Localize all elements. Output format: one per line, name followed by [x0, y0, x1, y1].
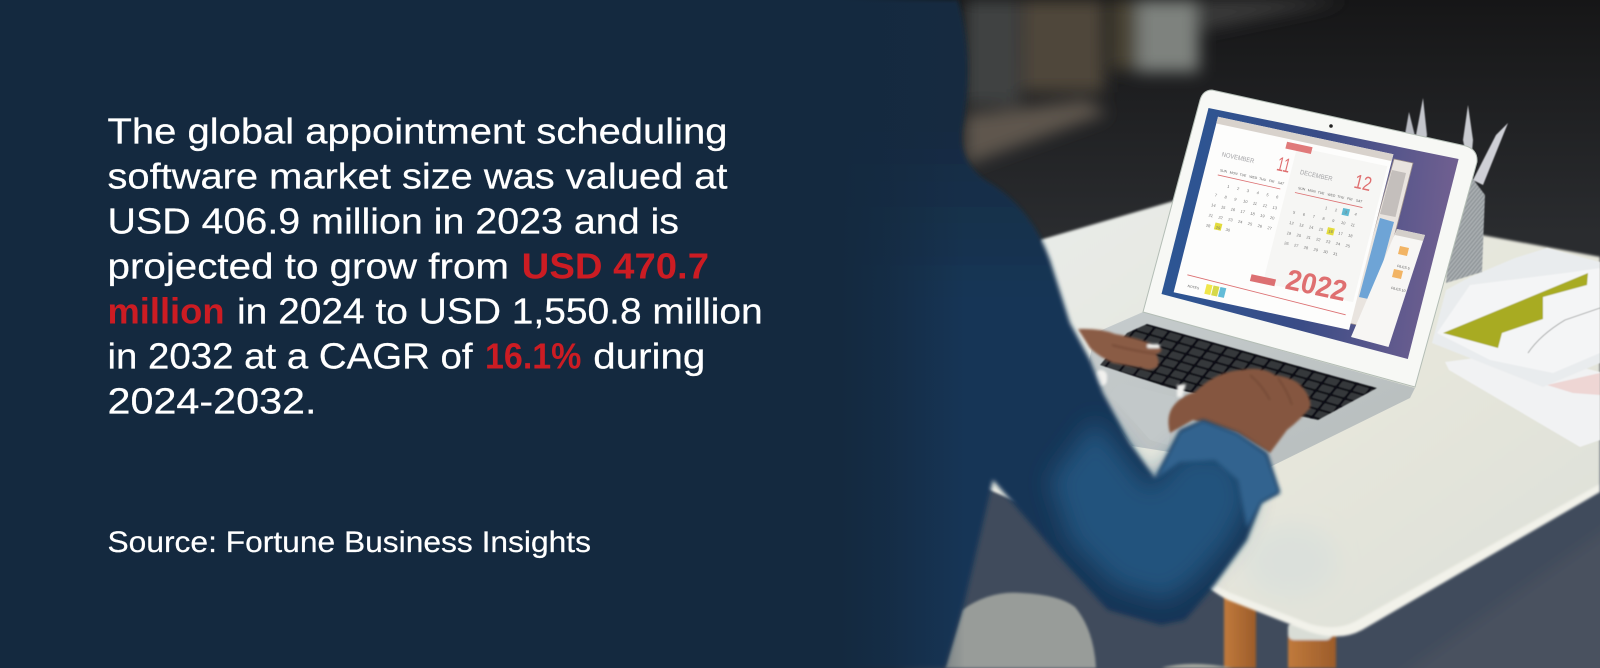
- december calendar: 20: [1296, 232, 1302, 238]
- december calendar: 9: [1332, 218, 1336, 223]
- november calendar: 11: [1275, 154, 1293, 178]
- december calendar: 15: [1318, 226, 1325, 232]
- november calendar: 29: [1215, 225, 1222, 231]
- trackpad: [1110, 383, 1175, 445]
- november calendar: 14: [1211, 202, 1217, 208]
- november calendar: 28: [1206, 223, 1212, 229]
- november calendar: THU: [1259, 177, 1267, 182]
- main statistic text: The global appointment scheduling: [108, 110, 728, 152]
- december calendar: WED: [1327, 192, 1336, 198]
- table top: [985, 187, 1600, 637]
- folder icons: [1398, 246, 1409, 256]
- december calendar: 1: [1325, 205, 1329, 211]
- december calendar: 31: [1333, 251, 1339, 257]
- navy fade into photo: [840, 0, 965, 668]
- main statistic text: software market size was valued at: [108, 156, 728, 196]
- november calendar: TUE: [1239, 173, 1247, 178]
- floor: [900, 430, 1600, 668]
- december calendar: TUE: [1317, 190, 1326, 196]
- november calendar: 10: [1243, 198, 1249, 204]
- november calendar: 20: [1269, 215, 1276, 221]
- december calendar: 13: [1299, 222, 1305, 228]
- year label: 2022: [1282, 264, 1350, 308]
- shirt cuff: [1157, 421, 1279, 528]
- december calendar: 22: [1316, 237, 1322, 242]
- calendar window: [1174, 117, 1393, 330]
- back window: [1348, 159, 1413, 328]
- november calendar: 17: [1240, 209, 1246, 215]
- laptop lid: [1143, 90, 1477, 387]
- main statistic text: million: [108, 290, 224, 332]
- main statistic text: [108, 110, 763, 422]
- main statistic text: 2024-2032.: [108, 380, 316, 422]
- december calendar: THU: [1337, 195, 1345, 200]
- red tabs: [1285, 142, 1313, 154]
- november calendar: 15: [1220, 204, 1227, 210]
- november calendar: 13: [1272, 205, 1278, 211]
- november calendar: 6: [1276, 194, 1280, 200]
- december calendar: SAT: [1355, 199, 1363, 204]
- blurred shelves in the background: [965, 0, 1347, 165]
- november calendar: 19: [1260, 213, 1266, 219]
- november calendar: SUN: [1219, 168, 1228, 174]
- december calendar: 12: [1352, 171, 1374, 196]
- webcam: [1329, 124, 1333, 128]
- december calendar: 14: [1308, 224, 1315, 230]
- november calendar: 27: [1267, 225, 1273, 231]
- december calendar: [1282, 160, 1374, 260]
- november calendar: 26: [1257, 223, 1263, 229]
- november calendar: SAT: [1277, 181, 1284, 186]
- files window: [1351, 229, 1425, 347]
- november calendar: 1: [1227, 184, 1231, 189]
- december calendar: 2: [1334, 207, 1339, 213]
- november calendar: 9: [1234, 197, 1238, 202]
- notes row: NOTES: [1187, 284, 1200, 291]
- notes row: [1187, 280, 1226, 298]
- december calendar: 4: [1354, 212, 1358, 217]
- december calendar: 11: [1350, 222, 1356, 228]
- november calendar: WED: [1249, 175, 1258, 180]
- photo background: dark room: [800, 0, 1600, 668]
- pink chart on lower paper: [1547, 373, 1600, 395]
- laptop base: [1085, 312, 1415, 468]
- november calendar: 3: [1246, 188, 1250, 193]
- december calendar: 10: [1341, 220, 1347, 226]
- main statistic text: USD 406.9 million in 2023 and is: [108, 200, 679, 242]
- papers with chart: [1432, 248, 1600, 447]
- december calendar: FRI: [1347, 197, 1353, 202]
- december calendar: 5: [1292, 210, 1297, 215]
- screen wallpaper: [1162, 108, 1459, 359]
- keyboard: [1100, 324, 1377, 420]
- november calendar: 5: [1266, 192, 1270, 198]
- table legs: [1224, 590, 1336, 668]
- chair: [945, 593, 1233, 668]
- december calendar: 17: [1338, 231, 1344, 237]
- december calendar: 12: [1289, 220, 1295, 226]
- left hand: [1078, 329, 1161, 386]
- december calendar: 21: [1306, 234, 1312, 240]
- november calendar: 21: [1208, 212, 1214, 218]
- december calendar: 27: [1293, 243, 1300, 248]
- main statistic text: USD 470.7: [522, 246, 709, 286]
- november calendar: FRI: [1268, 179, 1275, 184]
- right hand: [1168, 369, 1310, 453]
- november calendar: 8: [1224, 194, 1228, 200]
- november calendar: 23: [1228, 217, 1234, 223]
- main statistic text: in 2032 at a CAGR of: [108, 336, 473, 376]
- november calendar: [1204, 142, 1293, 242]
- november calendar: 24: [1237, 219, 1244, 225]
- files window: FILES 5: [1397, 264, 1410, 271]
- november calendar: NOVEMBER: [1221, 151, 1255, 165]
- december calendar: 30: [1323, 249, 1329, 255]
- november calendar: 4: [1256, 190, 1260, 196]
- november calendar: 16: [1230, 207, 1237, 212]
- december calendar: 7: [1312, 214, 1316, 219]
- november calendar: 12: [1262, 203, 1269, 209]
- main statistic text: in 2024 to USD 1,550.8 million: [237, 290, 763, 332]
- november calendar: 2: [1236, 186, 1241, 191]
- december calendar: DECEMBER: [1299, 169, 1333, 183]
- december calendar: 8: [1322, 216, 1326, 221]
- november calendar: MON: [1229, 170, 1239, 176]
- laptop: [1085, 90, 1477, 468]
- december calendar: 28: [1303, 245, 1310, 251]
- main statistic text: projected to grow from: [108, 246, 509, 286]
- november calendar: 25: [1247, 221, 1254, 227]
- green chart shape: [1443, 273, 1588, 348]
- december calendar: 26: [1284, 240, 1290, 246]
- november calendar: 11: [1252, 201, 1258, 206]
- december calendar: 16: [1328, 228, 1334, 234]
- shirt sleeve: [1050, 420, 1250, 600]
- files window: FILES 10: [1391, 286, 1406, 293]
- person in blue shirt: [840, 0, 1280, 668]
- december calendar: 3: [1344, 209, 1348, 215]
- december calendar: 19: [1286, 230, 1293, 236]
- december calendar: 18: [1348, 233, 1354, 239]
- source line: Source: Fortune Business Insights: [108, 526, 591, 559]
- december calendar: MON: [1307, 188, 1317, 194]
- december calendar: SUN: [1298, 186, 1306, 192]
- navy left panel: [0, 0, 840, 668]
- main statistic text: 16.1%: [485, 336, 581, 376]
- november calendar: 7: [1214, 192, 1218, 198]
- november calendar: 30: [1225, 227, 1231, 233]
- november calendar: 22: [1218, 215, 1224, 221]
- december calendar: 6: [1302, 212, 1306, 217]
- december calendar: 23: [1325, 239, 1332, 245]
- december calendar: 29: [1313, 247, 1319, 253]
- december panel: [1263, 147, 1387, 302]
- pencil cup with pencils: [1404, 98, 1508, 283]
- december calendar: 24: [1335, 241, 1342, 247]
- main statistic text: during: [593, 336, 705, 376]
- december calendar: 25: [1345, 243, 1351, 249]
- november calendar: 18: [1250, 211, 1256, 217]
